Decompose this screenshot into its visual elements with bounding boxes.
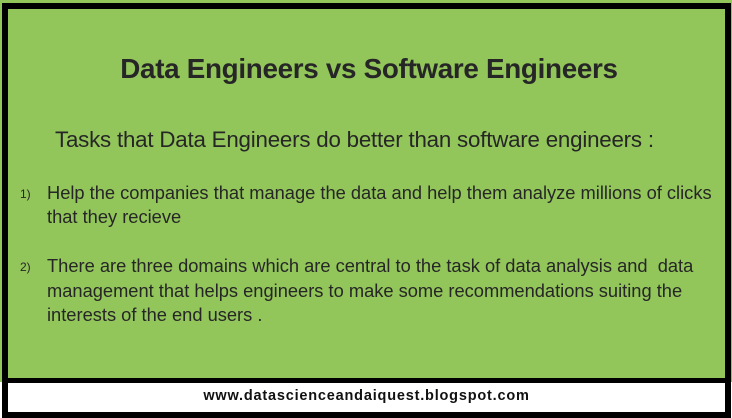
footer	[8, 378, 725, 412]
item 2: 2)	[20, 260, 31, 274]
subtitle: Tasks that Data Engineers do better than software engineers :	[55, 127, 654, 152]
item 1: Help the companies that manage the data and help them analyze millions of clicks	[47, 182, 712, 203]
footer: www.datascienceandaiquest.blogspot.com	[203, 388, 530, 404]
item 1: 1)	[20, 187, 31, 201]
item 1	[20, 182, 712, 227]
item 1: that they recieve	[47, 206, 181, 227]
item 2	[20, 255, 694, 325]
item 2: There are three domains which are central to the task of data analysis and data	[47, 255, 693, 276]
title: Data Engineers vs Software Engineers	[120, 53, 618, 84]
item 2: management that helps engineers to make some recommendations suiting the	[47, 280, 682, 300]
item 2: interests of the end users .	[47, 304, 262, 325]
